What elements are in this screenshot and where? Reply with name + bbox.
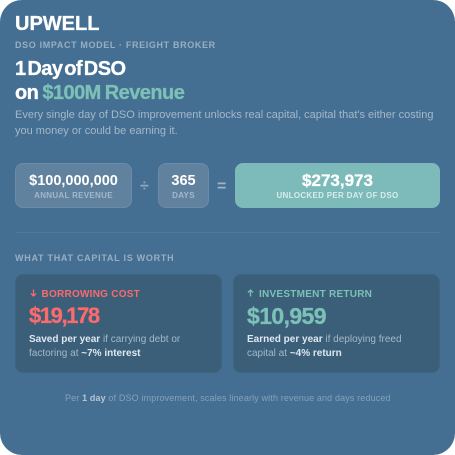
investment description: Earned per year if deploying freed (247, 334, 402, 345)
panel: borrowing cost (15, 274, 222, 373)
revenue label: ANNUAL REVENUE (34, 191, 113, 200)
borrowing description: factoring at ~7% interest (29, 348, 140, 358)
investment heading: INVESTMENT RETURN (259, 289, 372, 300)
intro text (15, 109, 433, 137)
icon: down arrow (30, 290, 36, 297)
investment description: capital at ~4% return (247, 348, 342, 358)
intro text: Every single day of DSO improvement unlocks real capital, capital that's either costing (15, 109, 433, 121)
result box (235, 163, 440, 208)
borrowing description (29, 334, 180, 358)
logo: UPWELL (15, 13, 99, 35)
footnote: Per 1 day of DSO improvement, scales linearly with revenue and days reduced (65, 393, 391, 403)
title: 1 Day of DSO (15, 58, 126, 80)
panel: investment return (233, 274, 440, 373)
title (15, 58, 184, 104)
intro text: you money or could be earning it. (15, 125, 178, 137)
section heading: WHAT THAT CAPITAL IS WORTH (15, 253, 174, 263)
title: on $100M Revenue (15, 82, 184, 104)
divide operator: ÷ (140, 178, 149, 195)
investment description (247, 334, 402, 358)
revenue value: $100,000,000 (29, 173, 118, 189)
investment value: $10,959 (247, 303, 326, 329)
eyebrow label: DSO IMPACT MODEL · FREIGHT BROKER (15, 40, 216, 50)
borrowing value: $19,178 (29, 303, 99, 328)
borrowing description: Saved per year if carrying debt or (29, 334, 180, 345)
equals operator: = (217, 178, 226, 195)
days value: 365 (171, 173, 196, 189)
result label: UNLOCKED PER DAY OF DSO (276, 191, 399, 200)
icon: up arrow (248, 289, 254, 296)
result value: $273,973 (302, 171, 373, 190)
borrowing heading: BORROWING COST (42, 289, 140, 300)
equation: days (158, 163, 209, 208)
equation: annual revenue (15, 163, 132, 208)
days label: DAYS (172, 191, 195, 200)
